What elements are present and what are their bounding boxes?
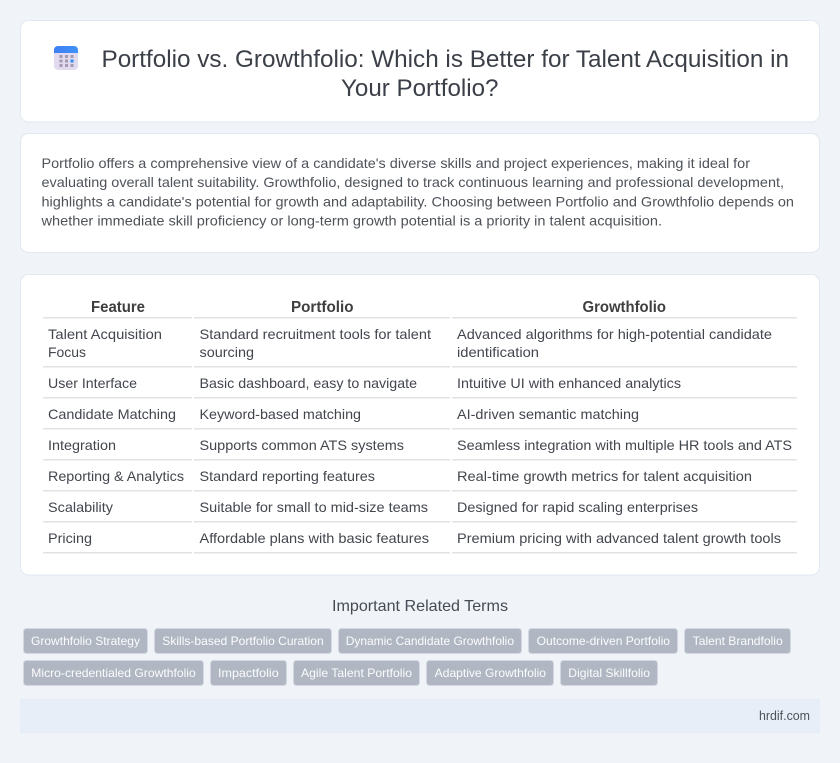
table row: reporting and analytics: Standard reporting features <box>200 468 375 484</box>
panel: introduction <box>20 134 820 252</box>
table row: pricing: Premium pricing with advanced talent growth tools <box>457 530 781 546</box>
icon: calendar grid <box>54 46 78 70</box>
table header row: Growthfolio <box>582 299 666 316</box>
table row: scalability: Designed for rapid scaling enterprises <box>457 499 698 515</box>
table row: user interface: Basic dashboard, easy to navigate <box>200 375 417 391</box>
table row: talent acquisition focus: Advanced algorithms for high-potential candidate <box>457 326 772 342</box>
heading: page title: Your Portfolio? <box>341 75 498 102</box>
table row: integration: Seamless integration with multiple HR tools and ATS <box>457 437 792 453</box>
tag group: related terms <box>24 628 790 686</box>
tag: agile talent portfolio <box>294 660 420 686</box>
footer <box>20 699 820 733</box>
table row: user interface <box>48 375 681 391</box>
tag: skills-based portfolio curation: Skills-based Portfolio Curation <box>162 634 324 648</box>
tag: outcome-driven portfolio: Outcome-driven Portfolio <box>537 634 670 648</box>
table header row: Portfolio <box>291 299 354 316</box>
tag: micro-credentialed growthfolio: Micro-credentialed Growthfolio <box>31 666 196 680</box>
table row: scalability <box>48 499 698 515</box>
footer source text: hrdif.com <box>759 708 810 723</box>
panel: comparison table <box>20 274 820 575</box>
table row: candidate matching: Candidate Matching <box>48 406 176 422</box>
tag: outcome-driven portfolio <box>528 628 678 654</box>
text block: introduction paragraph: Portfolio offers a comprehensive view of a candidate's diverse skills and project experiences, making it ideal for <box>42 155 750 171</box>
tag: growthfolio strategy: Growthfolio Strategy <box>31 634 140 648</box>
table row: talent acquisition focus: Talent Acquisition <box>48 326 162 342</box>
table row: candidate matching: Keyword-based matching <box>200 406 361 422</box>
tag: adaptive growthfolio <box>426 660 554 686</box>
table row: scalability: Suitable for small to mid-size teams <box>200 499 428 515</box>
table row: integration <box>48 437 792 453</box>
table row: talent acquisition focus: Standard recruitment tools for talent <box>200 326 431 342</box>
tag: agile talent portfolio: Agile Talent Portfolio <box>301 666 412 680</box>
table row: pricing <box>48 530 781 546</box>
text block: introduction paragraph: evaluating overall talent suitability. Growthfolio, designed to track continuous learning and professional development, <box>42 174 784 190</box>
table row: user interface: Intuitive UI with enhanced analytics <box>457 375 681 391</box>
heading: important related terms: Important Related Terms <box>332 598 508 615</box>
tag: adaptive growthfolio: Adaptive Growthfolio <box>435 666 546 680</box>
panel: title <box>20 20 820 122</box>
tag: impactfolio: Impactfolio <box>218 666 279 680</box>
tag: digital skillfolio: Digital Skillfolio <box>568 666 650 680</box>
tag: growthfolio strategy <box>24 628 148 654</box>
tag: micro-credentialed growthfolio <box>24 660 204 686</box>
table row: reporting and analytics: Reporting & Analytics <box>48 468 184 484</box>
table row: candidate matching <box>48 406 639 422</box>
text block: introduction paragraph <box>40 155 794 228</box>
table row: pricing: Affordable plans with basic features <box>200 530 429 546</box>
text block: introduction paragraph: highlights a candidate's potential for growth and adaptability. Choosing between Portfolio and Growthfolio depends on <box>42 194 794 210</box>
table row: reporting and analytics: Real-time growth metrics for talent acquisition <box>457 468 752 484</box>
table row: user interface: User Interface <box>48 375 137 391</box>
table row: talent acquisition focus <box>48 326 772 360</box>
tag: digital skillfolio <box>560 660 658 686</box>
table row: scalability: Scalability <box>48 499 113 515</box>
table header row: Feature <box>91 299 145 316</box>
table row: talent acquisition focus: sourcing <box>200 344 254 360</box>
tag: talent brandfolio: Talent Brandfolio <box>693 634 783 648</box>
table row: pricing: Pricing <box>48 530 92 546</box>
table row: talent acquisition focus: identification <box>457 344 539 360</box>
tag: impactfolio <box>210 660 286 686</box>
table header row <box>91 299 666 316</box>
tag: talent brandfolio <box>684 628 790 654</box>
tag: dynamic candidate growthfolio: Dynamic Candidate Growthfolio <box>346 634 514 648</box>
heading: page title: Portfolio vs. Growthfolio: Which is Better for Talent Acquisition in <box>102 46 789 73</box>
tag: dynamic candidate growthfolio <box>338 628 522 654</box>
heading: page title <box>102 46 789 102</box>
tag: skills-based portfolio curation <box>154 628 332 654</box>
table row: candidate matching: AI-driven semantic matching <box>457 406 639 422</box>
text block: introduction paragraph: whether immediate skill proficiency or long-term growth potential is a priority in talent acquisition. <box>40 212 662 228</box>
table row: talent acquisition focus: Focus <box>48 344 86 360</box>
table row: integration: Integration <box>48 437 116 453</box>
table row: reporting and analytics <box>48 468 752 484</box>
table row: integration: Supports common ATS systems <box>200 437 404 453</box>
